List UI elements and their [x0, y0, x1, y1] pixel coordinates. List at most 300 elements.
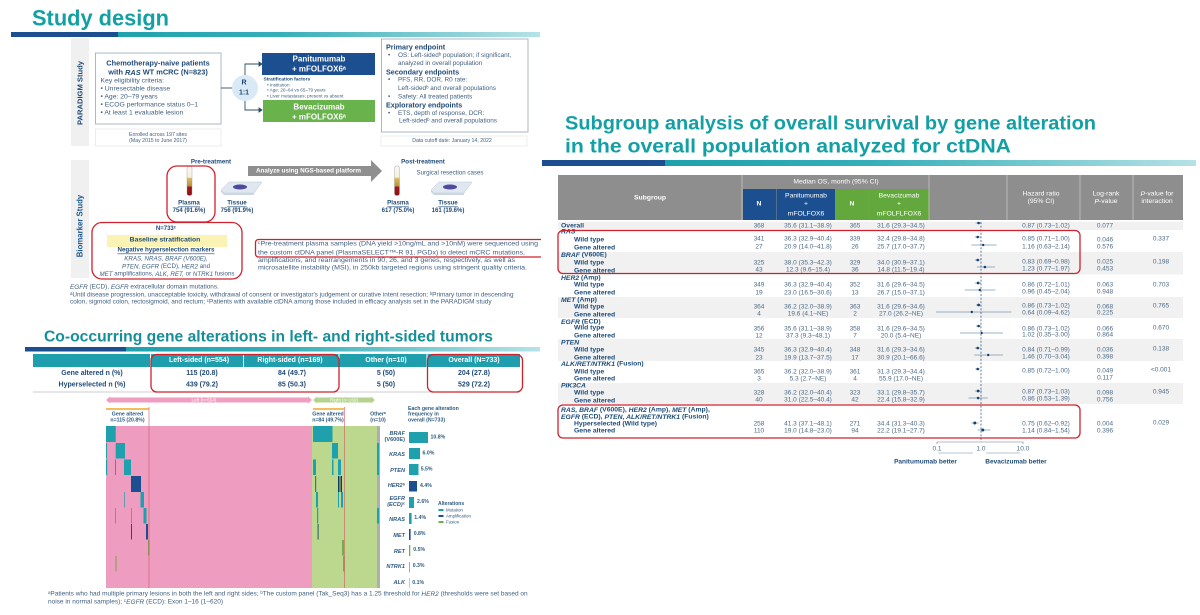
label: PARADIGM Study: PARADIGM Study	[76, 60, 84, 125]
rows: MET: 31.6 (29.6–34.6)	[877, 304, 925, 310]
chart: alteration frequency bars: 2.6%	[417, 499, 429, 505]
arrow: right tumors	[313, 396, 375, 404]
rows: BRAF: 36	[851, 266, 859, 274]
footnotes: study design: ᵃUntil disease progression, unacceptable toxicity, withdrawal of consent or investigator's judgement or curative intent resection; ᵇPrimary tumor in descending	[70, 292, 514, 298]
table: gene altered and hyperselected counts: 5 (50)	[377, 370, 395, 377]
rows: PIK3CA	[561, 382, 1170, 404]
chart: alteration frequency bars: NRAS	[389, 517, 405, 523]
rows: PTEN	[561, 340, 1170, 362]
rows: ALK/RET/NTRK1: <0.001	[1151, 366, 1171, 374]
text: tissue post-treatment: 161 (19.6%)	[432, 208, 464, 214]
table: gene altered and hyperselected counts: 529 (72.2)	[458, 382, 490, 388]
rows: PIK3CA: 22.4 (15.8–32.9)	[877, 396, 925, 404]
arm: panitumumab: + mFOLFOX6ᵃ	[292, 64, 346, 74]
rows: RAS: 0.046	[1097, 236, 1114, 244]
rows: ALK/RET/NTRK1: 31.3 (29.3–34.4)	[877, 368, 925, 376]
table header: subgroup analysis: mFOLFOX6	[788, 210, 825, 218]
arm: panitumumab: Panitumumab	[293, 54, 346, 64]
chart: alteration frequency bars: 0.5%	[413, 547, 426, 553]
box: data cutoff	[381, 136, 527, 146]
rows: EGFR: Wild type	[574, 324, 604, 332]
rows: RAS: 0.85 (0.71–1.00)	[1022, 236, 1070, 242]
rows: combined hyperselected: 271	[850, 420, 861, 428]
panel: biomarker study	[71, 158, 546, 279]
rows: BRAF: 38.0 (35.3–42.3)	[784, 260, 832, 266]
table: gene altered and hyperselected counts: Hyperselected n (%)	[59, 382, 125, 388]
arrows: randomisation	[221, 62, 262, 112]
legend: alterations: Amplification	[446, 514, 471, 518]
callout: overall column	[428, 354, 522, 392]
rows: PIK3CA: 323	[850, 390, 861, 396]
table: gene altered and hyperselected counts: Left-sided (n=554)	[169, 357, 229, 364]
chart: oncoprint heatmap	[106, 407, 380, 588]
rows: ALK/RET/NTRK1	[560, 360, 1171, 382]
rows: PTEN: PTEN	[561, 340, 580, 346]
chart: alteration frequency bars: 4.4%	[420, 483, 432, 489]
table header: subgroup analysis: +	[897, 200, 901, 208]
callout: baseline stratification: Negative hyperselection markers	[118, 246, 215, 254]
text: panel sequencing note	[258, 240, 538, 272]
rows: HER2: Gene altered	[574, 290, 615, 296]
rows: ALK/RET/NTRK1: 0.117	[1097, 374, 1113, 382]
box: enrolled sites: Enrolled across 197 sites	[129, 132, 187, 138]
box: endpoints: PFS, RR, DOR, R0 rate:	[398, 76, 467, 84]
rows: MET: 0.765	[1153, 302, 1170, 310]
rows: combined hyperselected: 34.4 (31.3–40.3)	[877, 420, 925, 428]
rows: combined hyperselected: 22.2 (19.1–27.7)	[877, 428, 925, 434]
box: endpoints: Exploratory endpoints	[386, 100, 462, 110]
chart: alteration frequency bars: 5.5%	[421, 466, 433, 472]
rows: ALK/RET/NTRK1: 55.9 (17.0–NE)	[879, 376, 923, 382]
table header: subgroup analysis	[558, 175, 1183, 220]
rows: PIK3CA: 42	[851, 396, 859, 404]
box: eligibility criteria: • Unresectable disease	[100, 86, 170, 92]
rows: EGFR: 35.6 (31.1–38.9)	[784, 326, 832, 332]
arm: bevacizumab: Bevacizumab	[293, 102, 345, 112]
rows: EGFR: Gene altered	[574, 332, 615, 340]
rows: MET: 0.068	[1097, 304, 1114, 310]
callout: panel highlight	[256, 240, 546, 257]
title: study design: Study design	[32, 6, 169, 30]
callout: baseline stratification: PTEN, EGFR (ECD), HER2 and	[122, 263, 211, 270]
rows: PIK3CA: PIK3CA	[561, 382, 586, 390]
rows: combined hyperselected: Hyperselected (Wild type)	[574, 420, 657, 428]
rows: combined hyperselected: 110	[754, 428, 765, 434]
chart: alteration frequency bars: HER2ᵇ	[388, 482, 406, 489]
table: gene altered and hyperselected counts	[33, 354, 520, 392]
rows: EGFR: 7	[853, 332, 857, 340]
text: plasma post-treatment	[382, 200, 414, 214]
rows: HER2: 19	[755, 290, 763, 296]
box: endpoints: •	[388, 52, 390, 59]
rows: BRAF	[561, 252, 1170, 274]
rows: RAS: RAS	[561, 228, 576, 236]
rows: MET: Wild type	[574, 304, 604, 310]
rows: combined hyperselected: 94	[851, 428, 859, 434]
rows: RAS: 1.16 (0.63–2.14)	[1022, 244, 1070, 250]
row: overall: 365	[850, 222, 861, 230]
rows: MET	[561, 296, 1170, 318]
table: gene altered and hyperselected counts: 204 (27.8)	[458, 370, 490, 377]
rows: RAS: 0.576	[1097, 244, 1114, 250]
rows: HER2: 349	[754, 282, 765, 288]
rows: HER2: 31.6 (29.6–34.5)	[877, 282, 925, 288]
legend: alterations: Fusion	[446, 520, 460, 524]
rows: BRAF: 0.83 (0.69–0.98)	[1022, 258, 1070, 266]
table header: subgroup analysis: Log-rank	[1093, 190, 1120, 198]
box: endpoints	[382, 39, 528, 132]
rows: EGFR: 1.02 (0.35–3.00)	[1022, 332, 1070, 338]
footnotes: study design: colon, sigmoid colon, rectosigmoid, and rectum; ᶜPatients with available ctDNA among those included in efficacy analysis set in the PARADIGM study	[70, 298, 492, 306]
chart: alteration frequency bars: 0.3%	[413, 563, 425, 569]
table header: subgroup analysis: N	[850, 200, 855, 208]
rows: PTEN: Gene altered	[574, 354, 615, 362]
rows: EGFR: 358	[850, 326, 861, 332]
rows: PIK3CA: Wild type	[574, 390, 604, 396]
text: plasma pre-treatment: Plasma	[178, 200, 200, 206]
rows: ALK/RET/NTRK1: Wild type	[574, 368, 604, 376]
chart: alteration frequency bars: ALK	[392, 580, 406, 586]
text: stratification factors: Stratification factors	[264, 76, 310, 82]
box: endpoints: Left-sidedᵇ and overall populations	[398, 85, 496, 92]
rows: EGFR: 31.6 (29.6–34.5)	[877, 326, 925, 332]
rows: BRAF: 12.3 (9.6–15.4)	[786, 266, 830, 274]
table header: subgroup analysis: P-value for	[1141, 190, 1174, 198]
chart axis: hazard ratio: 10.0	[1017, 446, 1030, 452]
table header: subgroup analysis: Bevacizumab	[879, 192, 920, 200]
chart axis: hazard ratio: 1.0	[976, 446, 986, 452]
label: pre-treatment: Pre-treatment	[191, 158, 231, 166]
rows: PIK3CA: 36.2 (32.0–40.4)	[784, 390, 832, 396]
rows: EGFR: 12	[755, 332, 763, 340]
rows: PTEN: 23	[755, 354, 763, 362]
table header: subgroup analysis: interaction	[1141, 198, 1173, 205]
panel: PARADIGM study	[71, 38, 528, 146]
label: other: (n=10)	[370, 418, 386, 424]
icon: randomisation circle: 1:1	[239, 90, 249, 96]
rows: BRAF: 0.198	[1153, 258, 1170, 266]
table header: subgroup analysis: +	[804, 200, 808, 208]
callout: RAS and BRAF rows	[558, 230, 1080, 274]
arm: panitumumab	[262, 53, 375, 75]
box: eligibility criteria: Key eligibility criteria:	[100, 78, 164, 84]
table header: subgroup analysis: Hazard ratio	[1022, 190, 1060, 198]
text: panel sequencing note: microsatellite instability (MSI), in 250kb targeted regions using stringent quality criteria.	[258, 264, 527, 272]
chart axis: hazard ratio: Bevacizumab better	[985, 458, 1047, 466]
arm: bevacizumab	[263, 100, 375, 122]
label: gene altered left: Gene altered	[112, 412, 143, 418]
footnotes: study design: EGFR (ECD), EGFR extracellular domain mutations.	[70, 284, 219, 290]
chart: alteration frequency bars: 1.4%	[414, 515, 427, 521]
footnotes: study design	[70, 284, 514, 306]
rows: EGFR: 0.86 (0.73–1.02)	[1022, 326, 1070, 332]
rows: RAS: 0.337	[1153, 236, 1170, 242]
chart: alteration frequency bars: (V600E)	[384, 437, 405, 443]
chart axis: hazard ratio	[894, 442, 1047, 466]
chart: alteration frequency bars: 0.1%	[412, 580, 425, 586]
rows: BRAF: 34.0 (30.9–37.1)	[877, 260, 925, 266]
box: endpoints: •	[388, 94, 390, 100]
rows: ALK/RET/NTRK1: 5.3 (2.7–NE)	[790, 376, 826, 382]
rows: BRAF: 14.8 (11.5–19.4)	[877, 266, 925, 274]
label: gene alteration frequency: Each gene alteration	[408, 406, 459, 412]
row: overall: 0.077	[1097, 222, 1114, 230]
title: subgroup analysis: Subgroup analysis of overall survival by gene alteration	[565, 114, 1096, 134]
box: endpoints: Left-sidedᵇ and overall populations	[399, 118, 497, 124]
rows: MET: 27.0 (26.2–NE)	[879, 310, 923, 318]
rows: PIK3CA: 31.0 (22.5–40.4)	[784, 396, 832, 404]
text: panel sequencing note: the custom ctDNA panel (PlasmaSELECT™-R 91, PGDx) to detect mCRC mutations,	[258, 250, 525, 256]
table: gene altered and hyperselected counts: 84 (49.7)	[278, 370, 306, 377]
rows: EGFR: 37.3 (9.3–48.1)	[786, 332, 830, 340]
table header: subgroup analysis: P-value	[1094, 198, 1118, 205]
callout: hyperselected rows	[558, 405, 1080, 438]
rows: PTEN: 36.3 (32.9–40.4)	[784, 346, 832, 354]
table: gene altered and hyperselected counts: 5 (50)	[377, 382, 395, 388]
rows: HER2: 36.3 (32.9–40.4)	[784, 282, 832, 288]
header bar: subgroup	[542, 160, 1196, 166]
icon: randomisation circle	[232, 75, 258, 101]
chart: alteration frequency bars: 10.8%	[430, 434, 446, 440]
rows: ALK/RET/NTRK1: 365	[754, 368, 765, 376]
label: gene altered left: n=115 (20.8%)	[110, 418, 145, 424]
icon: plasma tube post-treatment	[394, 166, 400, 196]
rows: PIK3CA: 0.86 (0.53–1.39)	[1022, 396, 1070, 402]
row: overall: Overall	[561, 222, 584, 230]
chart axis: hazard ratio: 0.1	[932, 446, 942, 452]
row: overall: 368	[754, 222, 765, 230]
rows: MET: 364	[754, 304, 765, 310]
rows: combined hyperselected: 0.029	[1153, 420, 1170, 426]
label: surgical resection: Surgical resection cases	[416, 170, 484, 176]
legend: alterations: Mutation	[446, 508, 463, 512]
table: gene altered and hyperselected counts: Other (n=10)	[365, 357, 407, 364]
rows: HER2: 352	[850, 282, 861, 288]
rows: HER2: 23.0 (16.5–30.6)	[784, 290, 832, 296]
icon: plasma tube pre-treatment	[187, 166, 192, 196]
chart: alteration frequency bars: KRAS	[389, 452, 405, 458]
rows: PTEN: 348	[850, 346, 861, 354]
rows: ALK/RET/NTRK1: Gene altered	[574, 376, 615, 382]
table: gene altered and hyperselected counts: 439 (79.2)	[186, 382, 218, 388]
rows: HER2: 0.703	[1153, 282, 1170, 288]
rows: MET: 36.2 (32.0–38.9)	[784, 304, 832, 310]
rows: MET: 0.86 (0.73–1.02)	[1022, 302, 1070, 310]
box: data cutoff: Data cutoff date: January 14, 2022	[412, 138, 492, 144]
text: panel sequencing note: ᶜPre-treatment plasma samples (DNA yield >10ng/mL and >10nM) were sequenced using	[258, 240, 538, 248]
table: gene altered and hyperselected counts: Gene altered n (%)	[61, 370, 123, 377]
rows: PTEN: 0.138	[1153, 346, 1170, 352]
text: stratification factors	[264, 76, 344, 98]
label: gene alteration frequency: frequency in	[408, 412, 439, 418]
rows: BRAF: 1.23 (0.77–1.97)	[1022, 266, 1070, 272]
rows: PTEN: Wild type	[574, 346, 604, 354]
rows: ALK/RET/NTRK1: 4	[853, 376, 857, 382]
rows: PTEN: 0.398	[1097, 354, 1114, 360]
box: endpoints: ETS, depth of response, DCR:	[398, 110, 485, 117]
rows: combined hyperselected: 0.396	[1097, 428, 1114, 434]
rows: HER2: HER2 (Amp)	[561, 274, 601, 282]
rows: ALK/RET/NTRK1: ALK/RET/NTRK1 (Fusion)	[560, 360, 644, 368]
rows: PIK3CA: 328	[754, 390, 765, 396]
rows: ALK/RET/NTRK1: 3	[757, 376, 761, 382]
rows: PIK3CA: Gene altered	[574, 398, 615, 404]
label: post-treatment: Post-treatment	[401, 158, 445, 166]
callout: plasma highlight	[167, 166, 215, 222]
arm: bevacizumab: + mFOLFOX6ᵃ	[292, 112, 346, 122]
text: plasma post-treatment: Plasma	[387, 200, 409, 206]
rows: combined hyperselected	[561, 406, 1170, 434]
icon: tissue slide post-treatment	[431, 182, 472, 195]
table header: subgroup analysis: N	[757, 200, 762, 208]
title: subgroup analysis: in the overall population analyzed for ctDNA	[565, 136, 1011, 158]
table header: subgroup analysis: Median OS, month (95% CI)	[793, 178, 879, 186]
rows: HER2: 0.86 (0.72–1.01)	[1022, 282, 1070, 288]
rows: BRAF: Wild type	[574, 260, 604, 266]
box: eligibility criteria: Chemotherapy-naive patients	[106, 58, 210, 68]
label: Biomarker Study: Biomarker Study	[76, 194, 84, 257]
rows: combined hyperselected: Gene altered	[574, 428, 615, 434]
table: gene altered and hyperselected counts: Overall (N=733)	[448, 357, 500, 364]
rows: BRAF: 329	[850, 260, 861, 266]
label: other	[370, 412, 386, 424]
chart: alteration frequency bars: MET	[393, 533, 406, 539]
rows: PTEN: 1.46 (0.70–3.04)	[1022, 354, 1070, 360]
arrow: right tumors: Right (n=169)	[330, 398, 358, 402]
rows: RAS: 27	[755, 244, 763, 250]
text: stratification factors: • Liver metastases: present vs absent	[267, 94, 344, 98]
rows: PTEN: 17	[851, 354, 859, 362]
header bar: study design	[11, 32, 540, 37]
rows: RAS	[561, 228, 1170, 252]
rows: EGFR: 356	[754, 326, 765, 332]
title: co-occurring gene alterations: Co-occurring gene alterations in left- and right-sided tumors	[44, 328, 493, 346]
callout: left and right columns	[151, 354, 339, 392]
text: tissue post-treatment: Tissue	[438, 200, 458, 206]
box: enrolled sites	[96, 129, 221, 146]
rows: RAS: 341	[754, 236, 765, 242]
legend: alterations: Alterations	[438, 501, 464, 507]
chart: alteration frequency bars: 6.0%	[422, 450, 435, 456]
rows: MET: 0.64 (0.09–4.62)	[1022, 310, 1070, 316]
box: eligibility criteria	[96, 53, 221, 124]
chart: forest plot	[936, 222, 1011, 442]
rows: BRAF: 325	[754, 260, 765, 266]
label: gene alteration frequency	[408, 406, 459, 424]
rows: RAS: 32.4 (29.8–34.8)	[877, 236, 925, 242]
row: overall	[561, 222, 1114, 230]
box: eligibility criteria: • Age: 20–79 years	[100, 94, 158, 100]
rows: BRAF: 43	[755, 266, 763, 274]
legend: alterations	[438, 501, 471, 524]
arrow: left tumors: Left (n=554)	[192, 398, 217, 402]
rows: PTEN: 0.84 (0.71–0.99)	[1022, 346, 1070, 354]
rows: MET: 0.225	[1097, 310, 1114, 316]
footnotes: co-occurring	[48, 590, 528, 606]
label: other: Otherᵃ	[370, 412, 386, 418]
rows: PTEN: 31.6 (29.3–34.6)	[877, 346, 925, 354]
text: tissue pre-treatment: Tissue	[227, 200, 247, 206]
text: stratification factors: • Age: 20–64 vs 65–79 years	[267, 88, 326, 92]
rows: combined hyperselected: 41.3 (37.1–48.1)	[784, 420, 832, 428]
rows: ALK/RET/NTRK1: 361	[850, 368, 861, 376]
row bands	[558, 222, 1183, 404]
callout: baseline stratification: MET amplifications, ALK, RET, or NTRK1 fusions	[100, 270, 234, 278]
rows: BRAF: 0.453	[1097, 266, 1114, 272]
rows: combined hyperselected: EGFR (ECD), PTEN, ALK/RET/NTRK1 (Fusion)	[561, 414, 709, 420]
rows: combined hyperselected: RAS, BRAF (V600E), HER2 (Amp), MET (Amp),	[561, 406, 710, 414]
rows: RAS: 36.3 (32.9–40.4)	[784, 236, 832, 242]
arrow: NGS platform	[248, 160, 382, 182]
rows: MET: 2	[853, 310, 857, 318]
header bar: co-occurring	[25, 347, 540, 352]
table header: subgroup analysis: mFOLFLFOX6	[877, 210, 921, 218]
chart: alteration frequency bars: (ECD)ᶜ	[387, 502, 406, 508]
title: subgroup analysis	[565, 114, 1096, 158]
text: panel sequencing note: amplifications, and rearrangements in 90, 26, and 3 genes, respectively, as well as	[258, 257, 516, 264]
chart: alteration frequency bars: NTRK1	[386, 564, 405, 570]
footnotes: co-occurring: noise in normal samples); ᶜEGFR (ECD): Exon 1–16 (1–620)	[48, 598, 223, 606]
table: gene altered and hyperselected counts: 115 (20.8)	[186, 370, 218, 377]
text: plasma pre-treatment: 754 (91.6%)	[173, 208, 205, 214]
icon: tissue slide pre-treatment	[221, 182, 262, 195]
text: stratification factors: • Institution	[267, 82, 290, 88]
text: tissue post-treatment	[432, 200, 464, 214]
rows: BRAF: BRAF (V600E)	[561, 252, 607, 258]
rows: RAS: 20.9 (14.0–41.8)	[784, 244, 832, 250]
rows: BRAF: Gene altered	[574, 268, 615, 274]
rows: HER2: 26.7 (15.0–37.1)	[877, 290, 925, 296]
callout: baseline stratification: N=733ᶜ	[156, 226, 177, 232]
rows: EGFR: 0.670	[1153, 324, 1170, 332]
rows: combined hyperselected: 0.75 (0.62–0.92)	[1022, 420, 1070, 428]
rows: HER2: 0.063	[1097, 282, 1114, 288]
arrow: NGS platform: Analyze using NGS-based platform	[256, 168, 361, 174]
rows: HER2: 0.96 (0.45–2.04)	[1022, 288, 1070, 296]
label: gene altered right: Gene altered	[312, 412, 344, 418]
rows: PTEN: 0.036	[1097, 346, 1114, 354]
rows: ALK/RET/NTRK1: 0.85 (0.72–1.00)	[1022, 368, 1070, 374]
rows: BRAF: 0.025	[1097, 258, 1114, 266]
rows: RAS: Gene altered	[574, 244, 615, 252]
label: gene alteration frequency: overall (N=733)	[408, 418, 445, 424]
callout: baseline stratification: KRAS, NRAS, BRAF (V600E),	[124, 256, 208, 262]
label: gene altered left	[106, 409, 149, 424]
box: enrolled sites: (May 2015 to June 2017)	[129, 138, 187, 144]
table header: subgroup analysis: Subgroup	[634, 194, 666, 202]
chart: alteration frequency bars: RET	[394, 549, 406, 555]
rows: HER2: 0.948	[1097, 288, 1114, 296]
rows: HER2: Wild type	[574, 282, 604, 288]
rows: MET: 363	[850, 304, 861, 310]
chart: alteration frequency bars: PTEN	[390, 468, 406, 474]
box: endpoints: Secondary endpoints	[386, 68, 459, 76]
table header: subgroup analysis: (95% CI)	[1028, 198, 1054, 205]
rows: PIK3CA: 0.756	[1097, 396, 1114, 404]
rows: EGFR: 20.0 (5.4–NE)	[881, 332, 921, 340]
chart: alteration frequency bars	[384, 431, 446, 588]
box: endpoints: Safety: All treated patients	[398, 94, 472, 100]
rows: PTEN: 345	[754, 346, 765, 354]
row: overall: 0.87 (0.73–1.02)	[1022, 222, 1070, 230]
box: endpoints: •	[388, 110, 390, 117]
rows: HER2	[561, 274, 1170, 296]
rows: RAS: 25.7 (17.0–37.7)	[877, 244, 925, 250]
rows: combined hyperselected: 19.0 (14.8–23.0)	[784, 428, 832, 434]
label: gene altered right	[312, 409, 344, 424]
rows: PIK3CA: 33.1 (29.8–35.7)	[877, 390, 925, 396]
rows: PIK3CA: 0.098	[1097, 390, 1114, 396]
